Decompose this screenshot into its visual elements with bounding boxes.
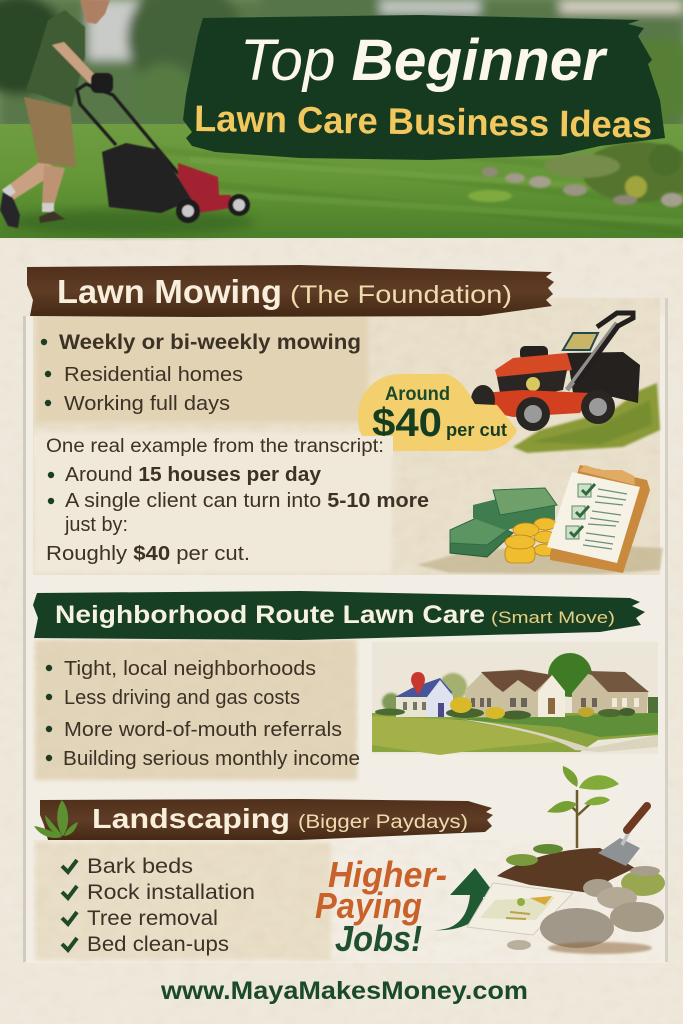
- checklist: landscaping services: Tree removal: [87, 907, 218, 930]
- bullet list: mowing services: [41, 331, 361, 415]
- title line one: Top Beginner: [240, 28, 608, 93]
- bullet list: mowing services: Residential homes: [64, 364, 243, 386]
- bullet list: route benefits: Less driving and gas costs: [64, 687, 300, 709]
- callout: around $40 per cut: Around: [385, 384, 450, 405]
- text block: real example: One real example from the transcript:: [46, 436, 384, 457]
- bullet list: route benefits: [46, 658, 360, 770]
- text block: real example: Around 15 houses per day: [65, 464, 322, 486]
- section header: landscaping: (Bigger Paydays): [298, 812, 468, 833]
- bullet list: route benefits: Building serious monthly income: [63, 748, 360, 770]
- icon: cash and gold coins: [417, 488, 663, 574]
- push mower in photo: [77, 84, 250, 223]
- callout text: higher-paying jobs: Higher-: [328, 854, 447, 895]
- callout: around $40 per cut: $40: [372, 401, 442, 445]
- map pin: [411, 672, 425, 695]
- section header: lawn mowing: (The Foundation): [290, 281, 512, 309]
- section header: lawn mowing: Lawn Mowing: [57, 273, 282, 310]
- plan sheet: [467, 883, 573, 935]
- callout text: higher-paying jobs: [315, 854, 447, 959]
- section header: neighborhood route: [33, 591, 645, 640]
- text block: real example: just by:: [64, 514, 128, 536]
- checklist: landscaping services: Bed clean-ups: [87, 933, 229, 956]
- section header: landscaping: Landscaping: [92, 803, 290, 834]
- illustration: plant, trowel, soil, stones and plan: [467, 766, 665, 954]
- stones: [507, 866, 665, 954]
- title line two: Lawn Care Business Ideas: [194, 98, 652, 145]
- checklist: landscaping services: Rock installation: [87, 881, 255, 904]
- checklist: landscaping services: Bark beds: [87, 855, 193, 878]
- callout text: higher-paying jobs: Jobs!: [335, 918, 422, 959]
- bullet list: mowing services: Working full days: [64, 393, 230, 415]
- section header: neighborhood route: Neighborhood Route Lawn Care: [55, 601, 485, 629]
- icon: red lawn mower on grass: [471, 313, 660, 453]
- panel: lawn mowing: [27, 265, 663, 575]
- callout: around $40 per cut: [358, 374, 517, 451]
- section header: neighborhood route: (Smart Move): [491, 608, 615, 627]
- bullet list: route benefits: More word-of-mouth referrals: [64, 719, 342, 741]
- text block: real example: [34, 436, 429, 565]
- bullet list: mowing services: Weekly or bi-weekly mowing: [59, 331, 361, 354]
- section header: landscaping: [40, 799, 493, 840]
- text block: real example: A single client can turn into 5-10 more: [65, 490, 429, 512]
- tan house: [465, 669, 565, 717]
- trowel: [598, 806, 647, 866]
- panel: neighborhood route lawn care: [33, 591, 658, 780]
- brown roof house: [572, 671, 649, 713]
- garden bed and stones: [468, 142, 683, 207]
- checklist: landscaping services: [62, 855, 255, 956]
- footer website: www.MayaMakesMoney.com: [160, 977, 528, 1005]
- bullet list: route benefits: Tight, local neighborhoods: [64, 658, 316, 680]
- callout text: higher-paying jobs: Paying: [315, 885, 422, 926]
- icon: checklist clipboard: [547, 465, 650, 573]
- section header: lawn mowing: [27, 265, 554, 317]
- hero photo: man mowing lawn: [0, 0, 683, 238]
- panel: landscaping: [33, 766, 665, 962]
- arrow: upward green: [430, 868, 497, 930]
- illustration: neighborhood houses: [372, 642, 658, 755]
- callout: around $40 per cut: per cut: [446, 420, 507, 440]
- hedges and yellow shrubs: [375, 697, 635, 720]
- title banner: [183, 15, 665, 160]
- man with green shirt and shorts: [0, 0, 113, 228]
- icon: green leaves: [34, 800, 78, 838]
- seedling: [547, 766, 619, 848]
- text block: real example: Roughly $40 per cut.: [46, 543, 250, 565]
- house with blue roof: [395, 678, 453, 717]
